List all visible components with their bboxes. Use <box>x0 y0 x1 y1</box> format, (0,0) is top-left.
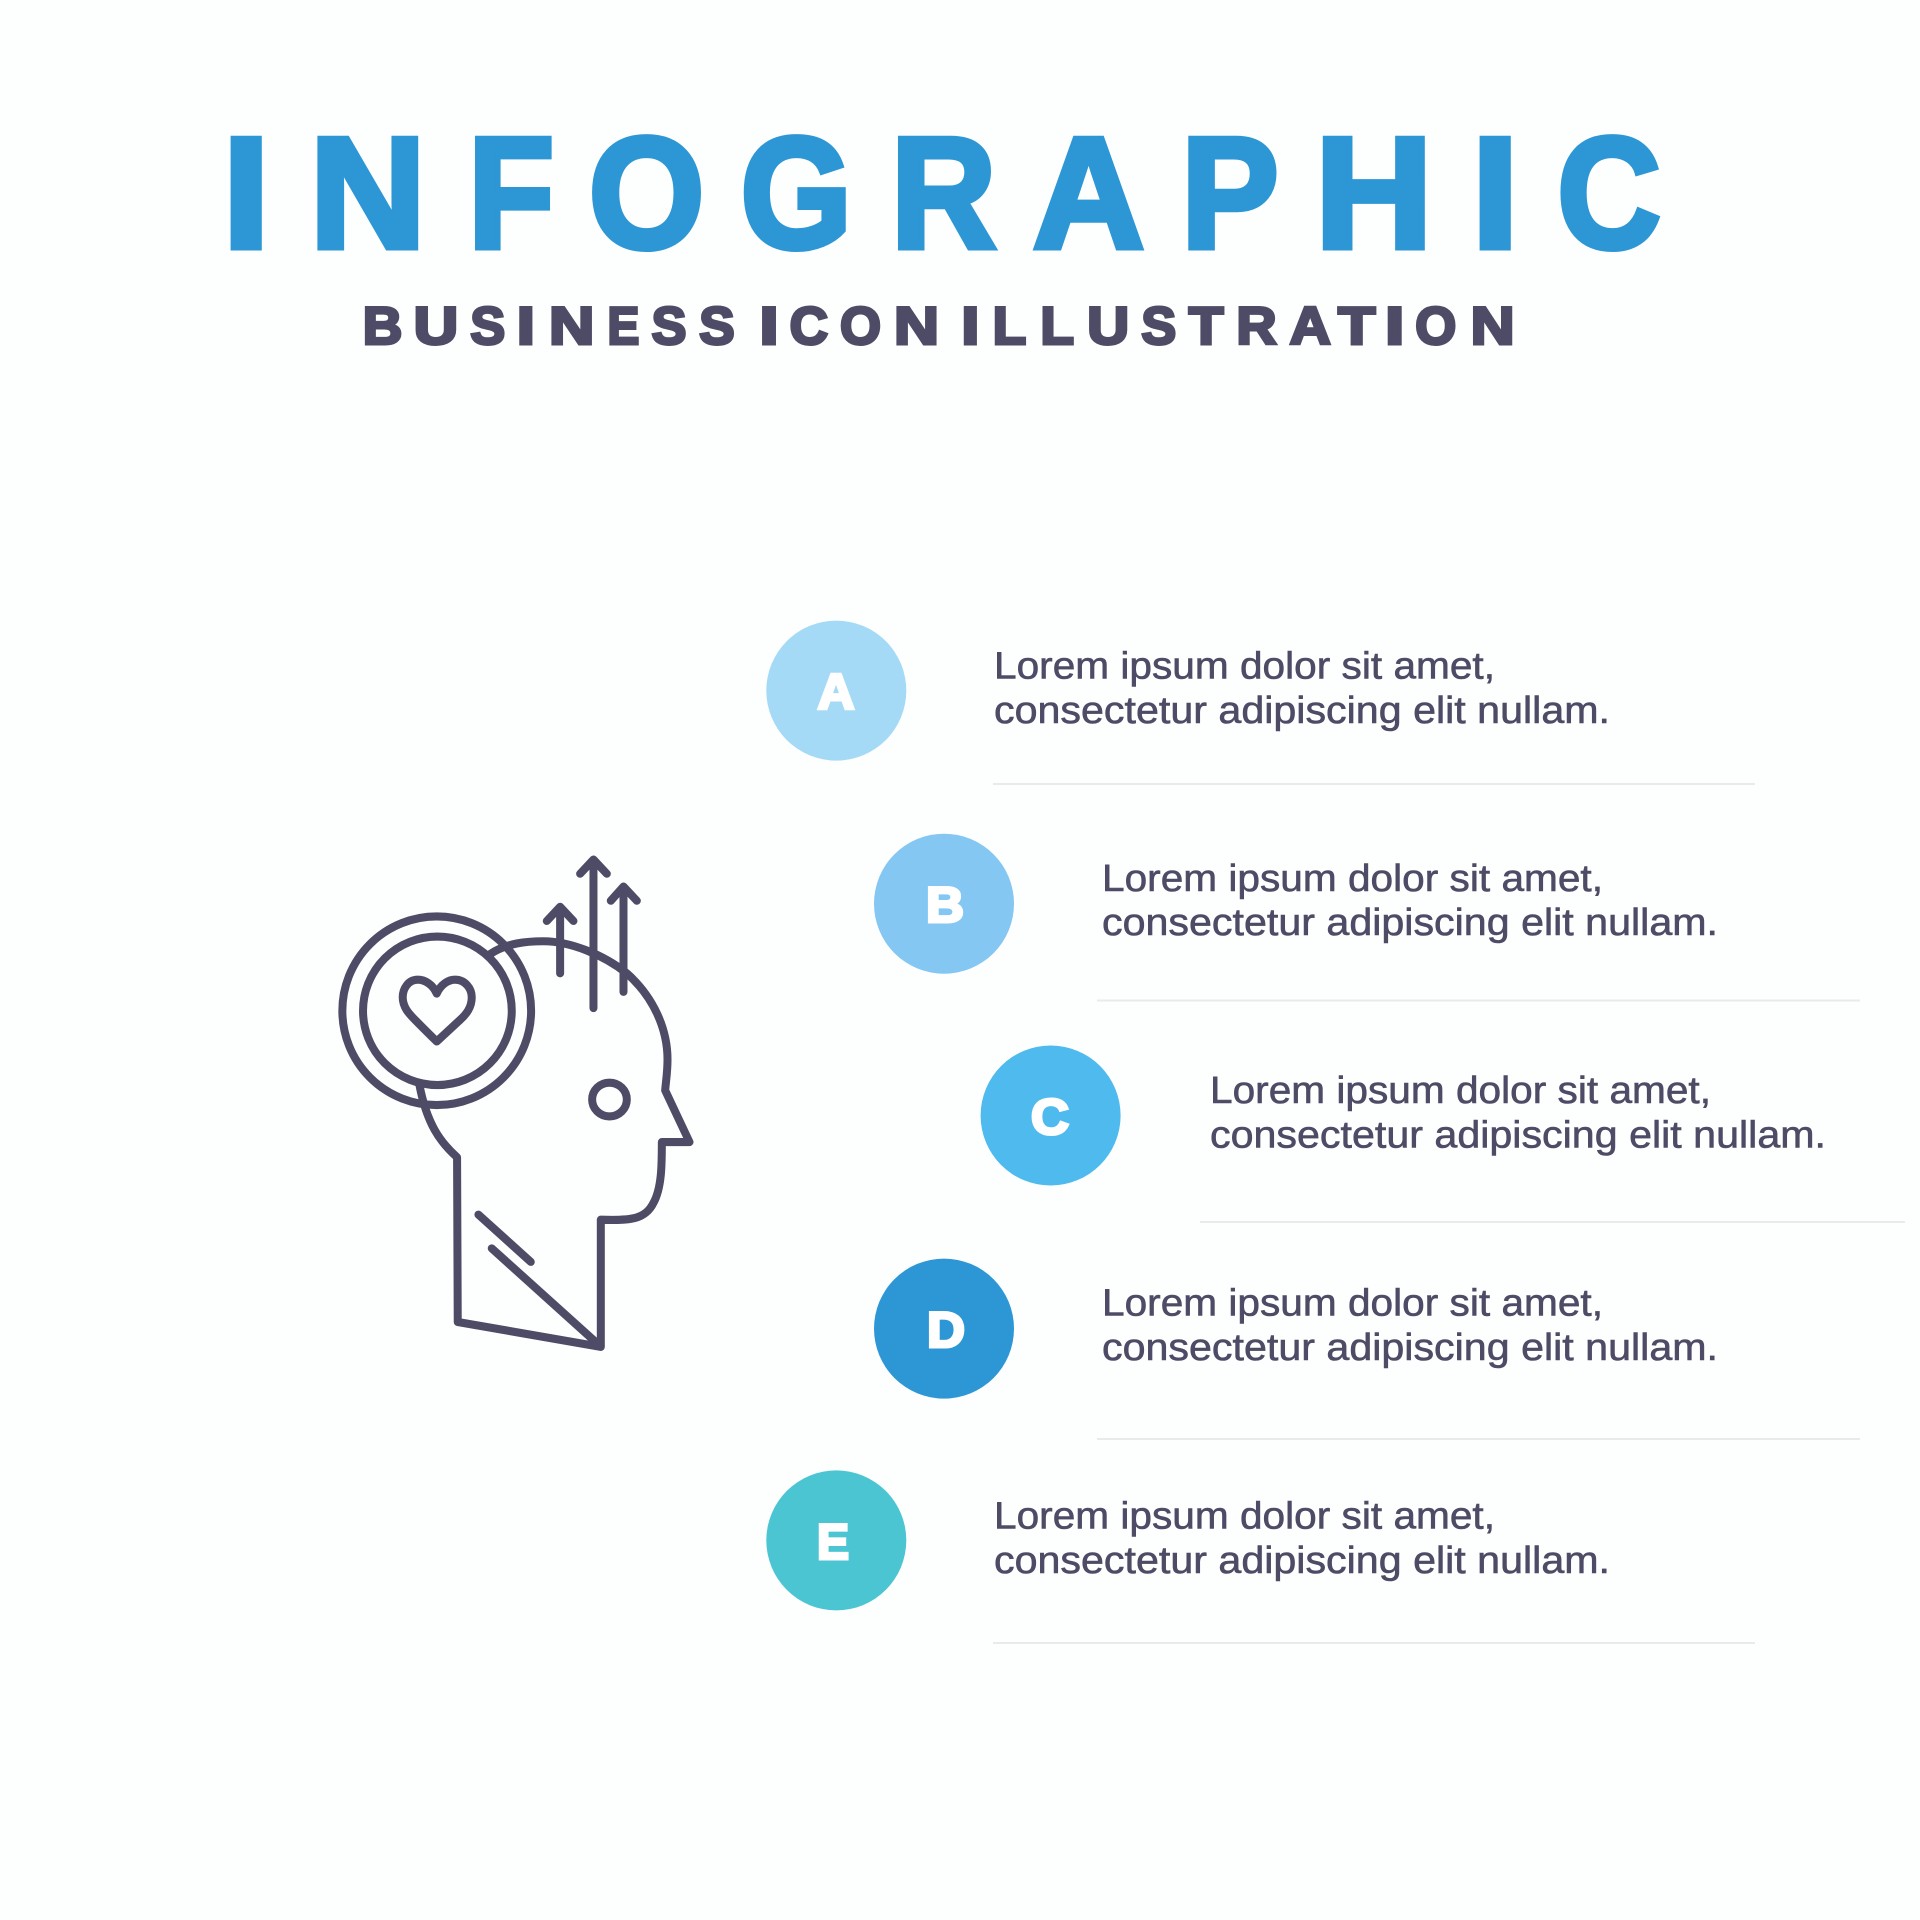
title: H <box>1315 106 1433 282</box>
subtitle: O <box>840 297 881 356</box>
letter D: D <box>927 1302 965 1358</box>
list item D <box>874 1259 1860 1439</box>
text A: Lorem ipsum dolor sit amet, <box>994 645 1495 687</box>
subtitle: L <box>993 297 1026 356</box>
list item C <box>981 1046 1905 1222</box>
subtitle: N <box>549 297 594 356</box>
subtitle: O <box>1415 297 1456 356</box>
badge A <box>766 621 906 761</box>
letter A: A <box>818 664 854 720</box>
icon: heart <box>403 980 472 1041</box>
subtitle: I <box>759 297 779 356</box>
text B: Lorem ipsum dolor sit amet, <box>1102 858 1603 900</box>
subtitle: N <box>894 297 939 356</box>
subtitle: I <box>517 297 535 356</box>
title: R <box>891 106 996 282</box>
subtitle: A <box>1290 297 1331 356</box>
subtitle: S <box>470 297 505 356</box>
subtitle: S <box>1141 297 1176 356</box>
badge C <box>981 1046 1121 1186</box>
subtitle: I <box>1385 297 1404 356</box>
list item A <box>766 621 1755 784</box>
text E: Lorem ipsum dolor sit amet, <box>994 1496 1495 1538</box>
title: N <box>310 106 426 282</box>
subtitle: S <box>699 297 735 356</box>
title: G <box>741 106 852 282</box>
icon: neck lines <box>478 1215 598 1345</box>
badge B <box>874 834 1014 974</box>
icon: eye <box>592 1083 627 1116</box>
letter E: E <box>817 1514 849 1570</box>
text D: consectetur adipiscing elit nullam. <box>1102 1327 1718 1369</box>
text E: consectetur adipiscing elit nullam. <box>994 1540 1610 1582</box>
title: C <box>1557 106 1661 282</box>
icon: up arrows <box>547 860 637 1008</box>
list item E <box>766 1470 1755 1643</box>
subtitle: E <box>608 297 639 356</box>
icon: head outline <box>419 941 690 1347</box>
list item B <box>874 834 1860 1000</box>
subtitle: S <box>652 297 686 356</box>
subtitle: N <box>1471 297 1515 356</box>
text D: Lorem ipsum dolor sit amet, <box>1102 1283 1603 1325</box>
title: I <box>222 106 270 282</box>
badge D <box>874 1259 1014 1399</box>
subtitle: U <box>414 297 458 356</box>
title: I <box>1471 106 1519 282</box>
subtitle <box>363 297 1515 356</box>
title <box>222 106 1661 282</box>
subtitle: T <box>1338 297 1375 356</box>
subtitle: B <box>363 297 402 356</box>
text A: consectetur adipiscing elit nullam. <box>994 690 1610 732</box>
subtitle: U <box>1087 297 1129 356</box>
letter C: C <box>1031 1089 1069 1145</box>
letter B: B <box>926 877 964 933</box>
title: O <box>589 106 704 282</box>
title: P <box>1181 106 1279 282</box>
subtitle: R <box>1236 297 1277 356</box>
subtitle: L <box>1040 297 1074 356</box>
icon: head with heart target and up arrows <box>342 860 690 1347</box>
text C: consectetur adipiscing elit nullam. <box>1210 1115 1826 1157</box>
title: F <box>468 106 554 282</box>
icon: outer ring <box>342 916 531 1105</box>
subtitle: T <box>1189 297 1224 356</box>
subtitle: I <box>961 297 980 356</box>
icon: inner ring <box>363 937 512 1085</box>
badge E <box>766 1470 906 1610</box>
subtitle: C <box>790 297 828 356</box>
title: A <box>1033 106 1144 282</box>
text C: Lorem ipsum dolor sit amet, <box>1210 1070 1711 1112</box>
text B: consectetur adipiscing elit nullam. <box>1102 902 1718 944</box>
